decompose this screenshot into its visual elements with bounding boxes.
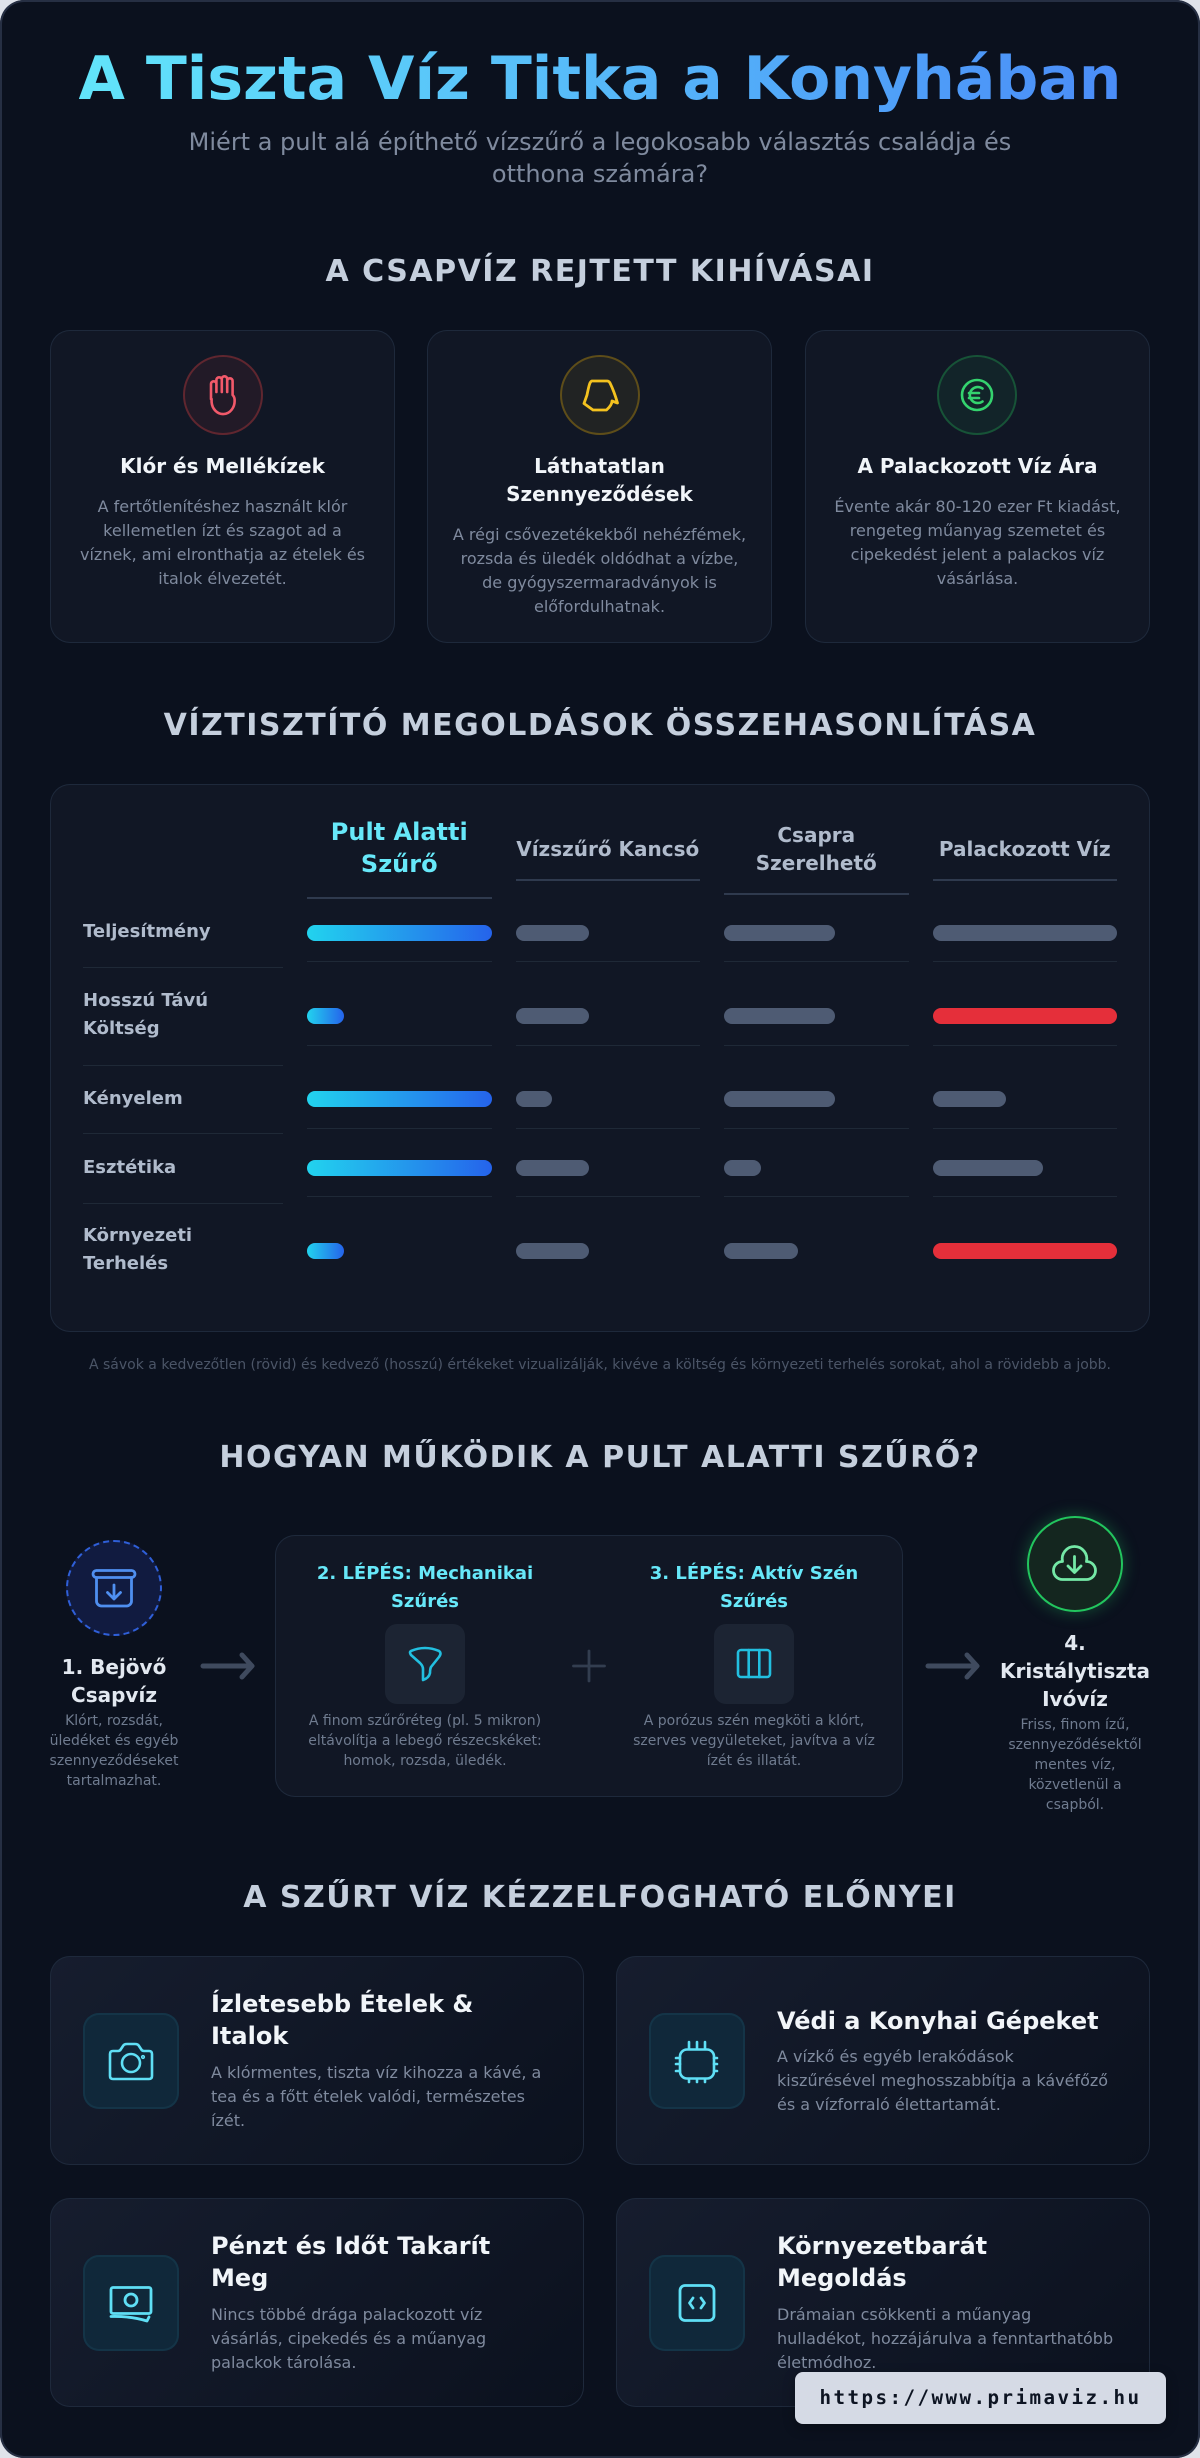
row label: Terhelés <box>83 1253 168 1274</box>
stage 3: activated carbon filtration <box>633 1562 875 1769</box>
card text: előfordulhatnak. <box>534 597 665 616</box>
step text: mentes víz, <box>1035 1757 1115 1773</box>
url badge: https://www.primaviz.hu <box>819 2386 1142 2409</box>
benefit title <box>211 1990 473 2050</box>
subtitle <box>189 128 1011 188</box>
benefit text: Drámaian csökkenti a műanyag <box>777 2304 1031 2324</box>
card title: Szennyeződések <box>506 482 693 506</box>
benefit text: A vízkő és egyéb lerakódások <box>777 2047 1014 2066</box>
step text: Friss, finom ízű, <box>1020 1717 1130 1733</box>
panel: comparison table <box>50 784 1150 1332</box>
benefit title: Védi a Konyhai Gépeket <box>777 2007 1099 2035</box>
stage title: Szűrés <box>720 1591 788 1612</box>
table row: convenience <box>83 1088 1117 1134</box>
card text: italok élvezetét. <box>158 569 287 588</box>
table row: aesthetics <box>83 1156 1117 1204</box>
icon: camera <box>83 2013 179 2109</box>
step text: szennyeződéseket <box>50 1753 178 1769</box>
step text: közvetlenül a <box>1028 1777 1122 1793</box>
benefit title: Megoldás <box>777 2264 907 2292</box>
row label: Esztétika <box>83 1156 176 1178</box>
column header: faucet mounted: Szerelhető <box>756 851 877 875</box>
icon: euro coin <box>937 355 1017 435</box>
step title: 1. Bejövő <box>62 1654 166 1678</box>
card title: Láthatatlan <box>534 454 665 478</box>
subtitle: otthona számára? <box>492 160 708 188</box>
benefit text: hulladékot, hozzájárulva a fenntarthatóbb <box>777 2328 1113 2348</box>
stage title: 2. LÉPÉS: Mechanikai <box>317 1563 533 1584</box>
heading: comparison: VÍZTISZTÍTÓ MEGOLDÁSOK ÖSSZEHASONLÍTÁSA <box>164 708 1036 742</box>
row label: Teljesítmény <box>83 921 211 942</box>
column header: under-sink filter: Szűrő <box>361 850 438 878</box>
stage text: A porózus szén megköti a klórt, <box>644 1713 864 1729</box>
heading: how it works: HOGYAN MŰKÖDIK A PULT ALATTI SZŰRŐ? <box>219 1440 981 1474</box>
icon: raised hand <box>182 355 262 435</box>
step title: Csapvíz <box>71 1682 157 1706</box>
panel: benefit saves money and time <box>50 2198 584 2407</box>
icon: chip <box>649 2013 745 2109</box>
card title: Klór és Mellékízek <box>120 454 325 478</box>
stage text: homok, rozsda, üledék. <box>343 1753 507 1769</box>
step title <box>1000 1630 1150 1710</box>
panel: contaminants card <box>427 330 772 643</box>
benefit text: palackok tárolása. <box>211 2352 356 2372</box>
card text: vásárlása. <box>937 569 1018 588</box>
icon: plus sign <box>572 1650 606 1682</box>
stage text: szerves vegyületeket, javítva a víz <box>633 1733 875 1749</box>
panel: benefit appliances <box>616 1956 1150 2165</box>
row label <box>83 1225 192 1274</box>
step text: tartalmazhat. <box>67 1773 161 1789</box>
table row: long-term cost <box>83 990 1117 1066</box>
benefit text <box>777 2302 1113 2374</box>
panel: chlorine card <box>50 330 395 643</box>
card text: rengeteg műanyag szemetet és <box>850 521 1105 540</box>
benefit title <box>211 2232 490 2292</box>
step text <box>50 1713 178 1789</box>
column header: under-sink filter: Pult Alatti <box>331 818 468 846</box>
column header: pitcher: Vízszűrő Kancsó <box>516 837 699 861</box>
card text: víznek, ami elronthatja az ételek és <box>80 545 365 564</box>
panel: benefit tastier food <box>50 1956 584 2165</box>
column header: faucet mounted <box>756 823 877 875</box>
row label: Kényelem <box>83 1088 183 1108</box>
benefit text: és a vízforraló élettartamát. <box>777 2095 1001 2114</box>
benefit title: Meg <box>211 2264 268 2292</box>
benefit text <box>211 2063 541 2130</box>
row label: Hosszú Távú <box>83 990 208 1011</box>
process step 1: incoming tap water <box>50 1540 178 1789</box>
row label: Költség <box>83 1018 160 1039</box>
icon: carbon columns <box>714 1624 794 1704</box>
card text: A régi csővezetékekből nehézfémek, <box>453 525 746 544</box>
step text: Klórt, rozsdát, <box>65 1713 163 1729</box>
column header: bottled water: Palackozott Víz <box>939 837 1111 861</box>
benefit text: kiszűrésével meghosszabbítja a kávéfőző <box>777 2071 1108 2090</box>
icon: banknote <box>83 2255 179 2351</box>
step text: szennyeződésektől <box>1008 1737 1142 1753</box>
step text: csapból. <box>1046 1797 1104 1813</box>
stage text: A finom szűrőréteg (pl. 5 mikron) <box>309 1713 541 1729</box>
card text <box>834 497 1121 588</box>
table row: environmental impact <box>83 1225 1117 1274</box>
column header: under-sink filter <box>331 818 468 878</box>
bars <box>307 925 1117 941</box>
table row: performance <box>83 921 1117 968</box>
benefit text: életmódhoz. <box>777 2352 876 2372</box>
benefit text: ízét. <box>211 2111 245 2130</box>
row label <box>83 990 208 1039</box>
card title: A Palackozott Víz Ára <box>857 454 1098 478</box>
bars <box>307 1160 1043 1176</box>
benefit text <box>211 2304 486 2372</box>
stage text: ízét és illatát. <box>707 1753 801 1769</box>
bars <box>307 1243 1117 1259</box>
card text <box>80 497 365 588</box>
stage title: Szűrés <box>391 1591 459 1612</box>
card text: Évente akár 80-120 ezer Ft kiadást, <box>834 497 1121 516</box>
process step 4: crystal clear drinking water <box>1000 1508 1150 1813</box>
stage title <box>650 1562 858 1612</box>
step title: 4. <box>1064 1630 1086 1654</box>
panel: bottled water cost card <box>805 330 1150 643</box>
row label: Környezeti <box>83 1225 192 1246</box>
footnote: A sávok a kedvezőtlen (rövid) és kedvező (hosszú) értékeket vizualizálják, kivéve a költség és környezeti terhelés sorokat, ahol a rövidebb a jobb. <box>89 1357 1111 1373</box>
card text: A fertőtlenítéshez használt klór <box>98 497 347 516</box>
benefit text: vásárlás, cipekedés és a műanyag <box>211 2328 486 2348</box>
arrow: step 1 to filter stages <box>200 1652 254 1680</box>
card text <box>453 525 746 616</box>
column header: faucet mounted: Csapra <box>777 823 855 847</box>
title: A Tiszta Víz Titka a Konyhában <box>78 44 1122 114</box>
panel: filter stages <box>275 1535 903 1797</box>
step title <box>62 1654 166 1706</box>
card text: de gyógyszermaradványok is <box>482 573 717 592</box>
stage title: 3. LÉPÉS: Aktív Szén <box>650 1563 858 1584</box>
card text: cipekedést jelent a palackos víz <box>851 545 1104 564</box>
bars <box>307 1091 1006 1107</box>
heading: benefits: A SZŰRT VÍZ KÉZZELFOGHATÓ ELŐNYEI <box>243 1880 957 1914</box>
benefit title: Pénzt és Időt Takarít <box>211 2232 490 2260</box>
benefit text <box>777 2047 1108 2114</box>
benefit title: Környezetbarát <box>777 2232 987 2260</box>
step text: üledéket és egyéb <box>50 1733 178 1749</box>
stage text <box>308 1713 542 1769</box>
step title: Ivóvíz <box>1042 1686 1108 1710</box>
icon: funnel <box>385 1624 465 1704</box>
icon: sediment bucket <box>560 355 640 435</box>
panel: benefit eco friendly <box>616 2198 1150 2407</box>
benefit text: tea és a főtt ételek valódi, természetes <box>211 2087 525 2106</box>
stage text <box>633 1713 875 1769</box>
benefit text: A klórmentes, tiszta víz kihozza a kávé, a <box>211 2063 541 2082</box>
benefit title: Ízletesebb Ételek & <box>211 1990 473 2018</box>
icon: code square <box>649 2255 745 2351</box>
benefit title <box>777 2230 987 2294</box>
icon: inbox with arrow <box>66 1540 162 1636</box>
subtitle: Miért a pult alá építhető vízszűrő a legokosabb választás családja és <box>189 128 1011 156</box>
benefit title: Italok <box>211 2022 288 2050</box>
card text: kellemetlen ízt és szagot ad a <box>103 521 342 540</box>
step title: Kristálytiszta <box>1000 1658 1150 1682</box>
icon: cloud with arrow <box>1027 1516 1123 1612</box>
card text: rozsda és üledék oldódhat a vízbe, <box>461 549 738 568</box>
bars <box>307 1008 1117 1024</box>
stage title <box>317 1562 533 1612</box>
arrow: filter stages to output <box>926 1652 980 1680</box>
step text <box>1008 1717 1142 1813</box>
card title <box>506 454 694 506</box>
stage 2: mechanical filtration <box>308 1562 542 1769</box>
url badge <box>795 2372 1166 2424</box>
benefit text: Nincs többé drága palackozott víz <box>211 2304 482 2324</box>
heading: challenges: A CSAPVÍZ REJTETT KIHÍVÁSAI <box>326 254 874 288</box>
stage text: eltávolítja a lebegő részecskéket: <box>308 1733 542 1749</box>
